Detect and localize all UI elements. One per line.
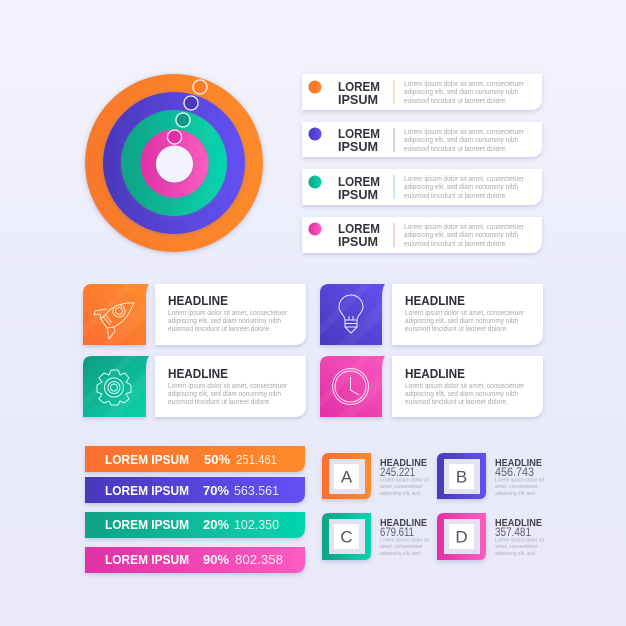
bar 2: 563.561 <box>234 483 279 498</box>
stat A: amet, consectetuer <box>380 484 423 490</box>
bar 2: 70% <box>203 484 229 498</box>
bar 4: 802.358 <box>235 552 283 567</box>
tile: light bulb <box>320 284 385 345</box>
stat B: HEADLINE <box>495 457 542 469</box>
badge A: A <box>341 468 353 486</box>
stat C: 679.611 <box>380 525 414 539</box>
icon: rocket <box>94 303 134 339</box>
stat C: Lorem ipsum dolor sit <box>380 538 429 544</box>
list row 4: LOREM <box>338 221 380 236</box>
card: light bulb text: Lorem ipsum dolor sit amet, consectetuer <box>405 310 525 317</box>
list row 4 <box>302 217 542 253</box>
bar 1: LOREM IPSUM <box>105 453 189 467</box>
badge B: B <box>456 468 467 486</box>
bar 3: LOREM IPSUM <box>105 518 189 532</box>
stat A: 245.221 <box>380 465 415 479</box>
stat A <box>380 457 429 497</box>
card: clock text: HEADLINE <box>405 367 465 381</box>
stat B: adipiscing elit, sed. <box>495 491 536 497</box>
list row 2: Lorem ipsum dolor sit amet, consectetuer <box>404 129 525 136</box>
stat D: 357.481 <box>495 525 531 539</box>
stat D: adipiscing elit, sed. <box>495 551 536 557</box>
card: rocket text: adipiscing elit, sed diam nonummy nibh <box>168 318 281 325</box>
stat D: HEADLINE <box>495 517 542 529</box>
stat C: HEADLINE <box>380 517 427 529</box>
badge D <box>437 513 486 560</box>
stat A: HEADLINE <box>380 457 427 469</box>
list row 3: euismod tincidunt ut laoreet dolore. <box>404 193 507 200</box>
card: light bulb text: euismod tincidunt ut laoreet dolore. <box>405 326 508 333</box>
stat D: amet, consectetuer <box>495 544 538 550</box>
card: light bulb text: HEADLINE <box>405 294 465 308</box>
card: clock text: adipiscing elit, sed diam nonummy nibh <box>405 391 518 398</box>
bar 3: 20% <box>203 518 229 532</box>
list row 1: Lorem ipsum dolor sit amet, consectetuer <box>404 81 525 88</box>
stat C: amet, consectetuer <box>380 544 423 550</box>
list row 2: IPSUM <box>338 139 378 154</box>
list row 3 <box>302 169 542 205</box>
card: clock text: euismod tincidunt ut laoreet dolore. <box>405 399 508 406</box>
card: gear text: Lorem ipsum dolor sit amet, consectetuer <box>168 383 288 390</box>
bar 1 <box>85 446 305 472</box>
card: gear text: adipiscing elit, sed diam nonummy nibh <box>168 391 281 398</box>
list row 3: Lorem ipsum dolor sit amet, consectetuer <box>404 176 525 183</box>
card: clock text <box>392 356 543 417</box>
stat C: adipiscing elit, sed. <box>380 551 421 557</box>
tile: clock <box>320 356 385 417</box>
bar 1: 251.461 <box>236 452 277 467</box>
icon: light bulb <box>339 295 363 333</box>
stat B: Lorem ipsum dolor sit <box>495 478 544 484</box>
stat B: amet, consectetuer <box>495 484 538 490</box>
card: light bulb text: adipiscing elit, sed diam nonummy nibh <box>405 318 518 325</box>
list row 2: adipiscing elit, sed diam nonummy nibh <box>404 137 518 144</box>
list row 1: IPSUM <box>338 92 378 107</box>
badge A <box>322 453 371 499</box>
bar 2 <box>85 477 305 503</box>
badge D: D <box>455 528 468 546</box>
list row 2: euismod tincidunt ut laoreet dolore. <box>404 146 507 153</box>
card: gear text: euismod tincidunt ut laoreet dolore. <box>168 399 271 406</box>
list row 3: IPSUM <box>338 187 378 202</box>
list row 3: LOREM <box>338 174 380 189</box>
list row 4: adipiscing elit, sed diam nonummy nibh <box>404 232 518 239</box>
list row 1 <box>302 74 542 110</box>
stat A: adipiscing elit, sed. <box>380 491 421 497</box>
list row 4: Lorem ipsum dolor sit amet, consectetuer <box>404 224 525 231</box>
bar 3 <box>85 512 305 538</box>
badge B <box>437 453 486 499</box>
icon: gear <box>97 370 131 405</box>
tile: rocket <box>83 284 149 345</box>
stat D <box>495 517 544 557</box>
stat B: 456.743 <box>495 465 534 479</box>
card: light bulb text <box>392 284 543 345</box>
list row 3: adipiscing elit, sed diam nonummy nibh <box>404 184 518 191</box>
list row 1: LOREM <box>338 79 380 94</box>
card: rocket text: HEADLINE <box>168 294 228 308</box>
list row 2: LOREM <box>338 126 380 141</box>
concentric circle chart <box>85 74 263 252</box>
card: clock text: Lorem ipsum dolor sit amet, consectetuer <box>405 383 525 390</box>
bar 4: LOREM IPSUM <box>105 553 189 567</box>
bar 4: 90% <box>203 553 229 567</box>
bar 4 <box>85 547 305 573</box>
stat B <box>495 457 544 497</box>
stat D: Lorem ipsum dolor sit <box>495 538 544 544</box>
bar 3: 102.350 <box>234 517 279 532</box>
list row 1: euismod tincidunt ut laoreet dolore. <box>404 98 507 105</box>
icon: clock <box>332 368 368 404</box>
bar 1: 50% <box>204 453 230 467</box>
card: rocket text: euismod tincidunt ut laoreet dolore. <box>168 326 271 333</box>
bar 2: LOREM IPSUM <box>105 484 189 498</box>
list row 4: euismod tincidunt ut laoreet dolore. <box>404 241 507 248</box>
badge C: C <box>340 528 353 546</box>
stat A: Lorem ipsum dolor sit <box>380 478 429 484</box>
card: rocket text: Lorem ipsum dolor sit amet, consectetuer <box>168 310 288 317</box>
list row 4: IPSUM <box>338 234 378 249</box>
list row 2 <box>302 122 542 157</box>
badge C <box>322 513 371 560</box>
list row 1: adipiscing elit, sed diam nonummy nibh <box>404 89 518 96</box>
card: gear text <box>155 356 306 417</box>
card: gear text: HEADLINE <box>168 367 228 381</box>
card: rocket text <box>155 284 306 345</box>
tile: gear <box>83 356 149 417</box>
stat C <box>380 517 429 557</box>
